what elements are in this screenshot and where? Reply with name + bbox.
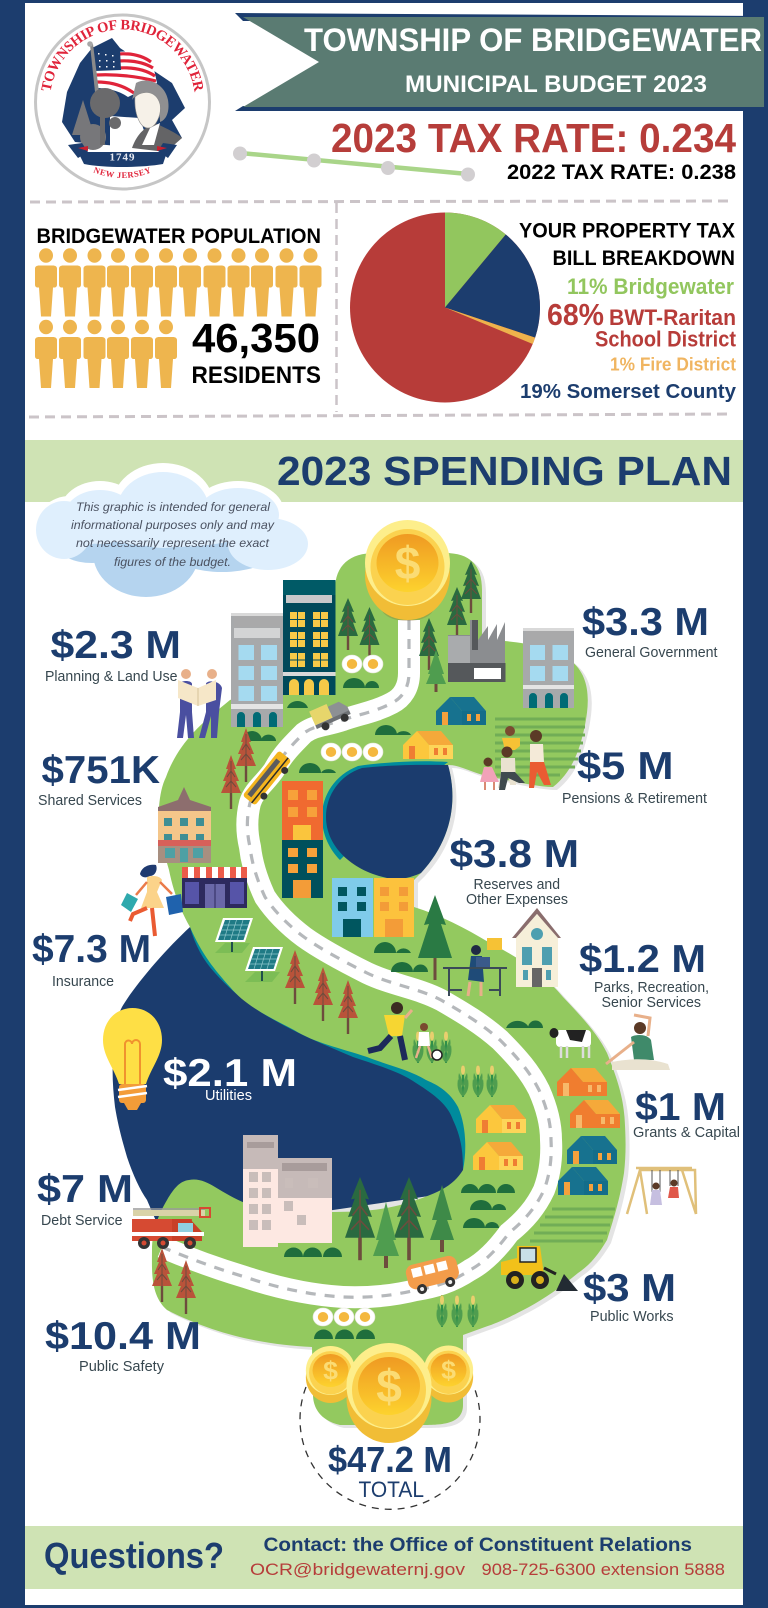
legend: school district xyxy=(547,297,737,352)
icon: centre coin: $ xyxy=(376,1360,402,1412)
icon: top coin: $ xyxy=(395,537,420,589)
callout: total xyxy=(328,1439,452,1502)
residents label: RESIDENTS xyxy=(192,362,321,389)
subtitle: MUNICIPAL BUDGET 2023 xyxy=(405,71,707,98)
seal arc name: TOWNSHIP OF BRIDGEWATER xyxy=(41,20,203,92)
shrubs middle xyxy=(374,942,543,1028)
icon: delivery truck xyxy=(309,697,353,734)
callout: pensions: Pensions & Retirement xyxy=(562,791,707,807)
disclaimer cloud xyxy=(34,463,312,597)
title banner xyxy=(235,13,768,111)
pond teal rim xyxy=(322,761,448,860)
resident count: 46,350 xyxy=(192,315,320,361)
callout: reserves: Other Expenses xyxy=(466,892,568,908)
white townhouse xyxy=(512,908,561,987)
breakdown heading: YOUR PROPERTY TAX xyxy=(519,220,735,242)
callout: general government xyxy=(582,601,718,661)
dark teal building xyxy=(282,840,323,898)
navy pond xyxy=(326,765,452,879)
panel: property tax breakdown xyxy=(350,212,737,403)
icon: yoga woman xyxy=(606,1015,670,1070)
flowers and shrubs upper xyxy=(242,655,411,773)
factory xyxy=(448,620,506,682)
cow xyxy=(550,1028,591,1058)
legend: Bridgewater: 11% Bridgewater xyxy=(567,274,734,299)
footer band xyxy=(25,1526,743,1589)
icon: shopper woman xyxy=(121,865,183,936)
tall evergreen xyxy=(418,895,452,980)
breakdown heading xyxy=(519,220,735,270)
tree group upper xyxy=(338,561,481,692)
legend: school district: BWT-Raritan xyxy=(609,305,736,330)
2023 tax rate: 2023 TAX RATE: 0.234 xyxy=(331,115,736,161)
icon: right coin: $ xyxy=(441,1355,456,1385)
legend: fire district: 1% Fire District xyxy=(610,355,736,375)
callout: utilities: Utilities xyxy=(205,1088,252,1104)
tan townhouse xyxy=(158,787,211,863)
legend: school district: 68% xyxy=(547,297,604,332)
callout: shared services: Shared Services xyxy=(38,793,142,809)
road centre dashes xyxy=(162,620,551,1297)
callout: public works: $3 M xyxy=(583,1267,676,1310)
spending plan heading: 2023 SPENDING PLAN xyxy=(277,448,732,494)
total dashed circle xyxy=(300,1387,480,1509)
callout: grants: Grants & Capital xyxy=(633,1125,740,1141)
callout: grants xyxy=(633,1086,740,1141)
callout: planning xyxy=(45,624,181,685)
tax rate trend line xyxy=(233,146,475,182)
questions heading: Questions? xyxy=(44,1535,224,1576)
callout: pensions: $5 M xyxy=(577,745,674,788)
legend: Somerset County: 19% Somerset County xyxy=(520,381,737,403)
teal shoreline xyxy=(190,927,480,1170)
callout: planning: Planning & Land Use xyxy=(45,669,178,685)
yellow house xyxy=(403,731,453,759)
icon: loader xyxy=(501,1246,578,1291)
seal year: 1749 xyxy=(110,152,136,164)
disclaimer text: informational purposes only and may xyxy=(71,518,275,532)
callout: parks: Senior Services xyxy=(602,995,701,1011)
icon: top coin xyxy=(365,520,450,621)
breakdown heading: BILL BREAKDOWN xyxy=(552,247,735,270)
seal state: NEW JERSEY xyxy=(93,167,150,178)
callout: public works xyxy=(583,1267,676,1325)
icon: woman at table xyxy=(443,938,507,996)
grey building right xyxy=(523,628,574,708)
pie chart xyxy=(350,212,540,402)
red trees lower left xyxy=(152,1248,196,1314)
spending plan header band xyxy=(25,440,743,502)
icon: swing set xyxy=(627,1168,696,1214)
grey office building left xyxy=(231,613,283,727)
callout: grants: $1 M xyxy=(635,1086,726,1129)
solar panels xyxy=(215,918,283,982)
township seal logo xyxy=(34,14,211,190)
flowers and shrubs lower xyxy=(313,1308,375,1339)
houses cluster xyxy=(473,1068,620,1195)
callout: insurance xyxy=(32,928,151,990)
icon: light bulb xyxy=(103,1008,162,1110)
population heading: BRIDGEWATER POPULATION xyxy=(36,225,321,248)
teal apartment building xyxy=(283,580,336,695)
red trees by road xyxy=(221,728,256,809)
callout: parks: Parks, Recreation, xyxy=(594,980,709,996)
callout: insurance: $7.3 M xyxy=(32,928,151,971)
land shadow xyxy=(156,556,630,1428)
contact line: Contact: the Office of Constituent Relations xyxy=(264,1535,692,1556)
pale city building xyxy=(243,1135,332,1247)
email: OCR@bridgewaternj.gov xyxy=(250,1560,466,1579)
callout: total: $47.2 M xyxy=(328,1439,452,1480)
icon: runner with child xyxy=(368,1002,442,1060)
title: TOWNSHIP OF BRIDGEWATER xyxy=(304,22,762,58)
callout: pensions xyxy=(562,745,707,807)
callout: total: TOTAL xyxy=(358,1477,424,1502)
striped field lower xyxy=(530,1209,615,1241)
corn rows xyxy=(413,1031,497,1327)
icon: right coin xyxy=(424,1346,473,1402)
red tree row xyxy=(285,950,358,1034)
2022 tax rate: 2022 TAX RATE: 0.238 xyxy=(507,161,736,184)
callout: reserves: $3.8 M xyxy=(450,833,579,876)
disclaimer text: figures of the budget. xyxy=(114,555,231,569)
population icons row 1 xyxy=(35,248,322,316)
callout: reserves: Reserves and xyxy=(474,877,560,893)
panel: population xyxy=(35,225,322,389)
disclaimer text: This graphic is intended for general xyxy=(76,500,270,514)
disclaimer text xyxy=(71,500,275,569)
icon: school bus xyxy=(243,750,295,808)
dollar-sign landscape xyxy=(103,553,696,1428)
callout: utilities: $2.1 M xyxy=(163,1052,297,1095)
phone: 908-725-6300 extension 5888 xyxy=(482,1560,725,1579)
bottom tree group xyxy=(345,1177,454,1268)
callout: parks: $1.2 M xyxy=(579,938,706,981)
disclaimer text: not necessarily represent the exact xyxy=(76,536,270,550)
orange building xyxy=(282,781,323,840)
icon: fire engine xyxy=(132,1208,210,1249)
navy water lobe xyxy=(113,927,470,1235)
callout: debt service: Debt Service xyxy=(41,1213,122,1229)
callout: reserves xyxy=(450,833,579,908)
population icons row 2 xyxy=(35,320,177,388)
callout: insurance: Insurance xyxy=(52,974,114,990)
green land xyxy=(152,553,626,1425)
callout: public safety: $10.4 M xyxy=(45,1315,201,1358)
shop with awning xyxy=(182,867,247,908)
callout: debt service xyxy=(37,1168,133,1229)
icon: orange bus xyxy=(404,1254,462,1297)
striped field upper xyxy=(495,719,585,775)
icon: left coin: $ xyxy=(323,1356,338,1386)
blue house xyxy=(436,697,486,725)
callout: general government: $3.3 M xyxy=(582,601,709,644)
callout: planning: $2.3 M xyxy=(50,624,181,667)
icon: left coin xyxy=(306,1346,355,1403)
callout: shared services xyxy=(38,749,160,809)
icon: engineers with plan xyxy=(177,669,222,738)
icon: centre coin xyxy=(346,1343,432,1443)
callout: shared services: $751K xyxy=(42,749,160,792)
road xyxy=(162,620,551,1297)
colourful apartment pair xyxy=(332,878,414,937)
callout: debt service: $7 M xyxy=(37,1168,133,1211)
callout: public safety xyxy=(45,1315,201,1375)
legend: school district: School District xyxy=(595,327,737,352)
icon: family running xyxy=(480,726,551,790)
callout: public safety: Public Safety xyxy=(79,1359,165,1375)
callout: public works: Public Works xyxy=(590,1309,674,1325)
callout: general government: General Government xyxy=(585,645,718,661)
callout: parks xyxy=(579,938,709,1011)
shrubs lower xyxy=(284,1184,515,1257)
